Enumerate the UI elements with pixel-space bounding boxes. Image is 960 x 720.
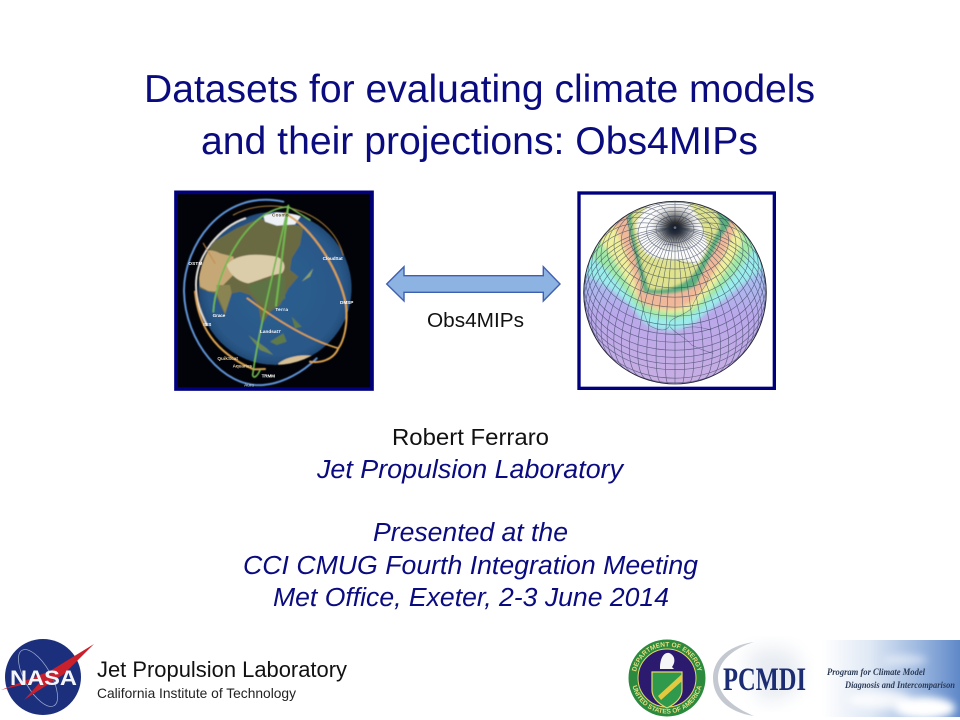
arrow: double-headed Obs4MIPs link	[387, 267, 560, 301]
panel: program banner with clouds: Diagnosis and Intercomparison	[844, 680, 955, 690]
satellite labels: Landsat7	[260, 329, 281, 334]
globe with coloured field	[580, 195, 770, 384]
icon: PCMDI logo: PCMDI	[723, 662, 806, 698]
title	[144, 68, 815, 163]
meeting details: Met Office, Exeter, 2-3 June 2014	[273, 584, 669, 612]
icon: NASA logo	[1, 639, 94, 715]
JPL label: Jet Propulsion Laboratory	[97, 657, 347, 682]
satellite labels: Terra	[275, 307, 288, 312]
satellite labels: OSTM	[188, 261, 202, 266]
panel: climate model globe grid	[579, 193, 774, 388]
icon: Department of Energy seal: DEPARTMENT OF ENERGY	[632, 642, 702, 672]
satellite labels	[188, 212, 353, 387]
icon: NASA logo: NASA	[10, 667, 77, 690]
meeting details: Presented at the	[373, 519, 568, 547]
latitude and longitude grid	[584, 201, 766, 384]
arrow label: Obs4MIPs	[427, 310, 524, 332]
panel: program banner with clouds: Program for Climate Model	[827, 667, 925, 677]
satellite labels: Aquarius	[233, 363, 252, 368]
satellite labels: Cosmo	[272, 212, 289, 217]
orbit tracks	[184, 200, 347, 385]
north pole contours	[652, 204, 698, 250]
continent coastlines	[627, 217, 733, 353]
satellite labels: DMSP	[340, 300, 353, 305]
panel: satellite orbits around Earth	[176, 192, 372, 389]
icon: Department of Energy seal: UNITED STATES OF AMERICA	[632, 685, 702, 714]
icon: Department of Energy seal	[628, 640, 706, 716]
icon: PCMDI logo	[713, 642, 806, 716]
presenter name: Robert Ferraro	[392, 424, 549, 450]
satellite labels: QuikScat	[217, 356, 238, 361]
satellite labels: ISS	[203, 322, 211, 327]
affiliation: Jet Propulsion Laboratory	[316, 456, 625, 484]
satellite labels: CloudSat	[323, 256, 343, 261]
globe outline	[584, 201, 766, 384]
meeting details	[243, 519, 698, 612]
title: and their projections: Obs4MIPs	[201, 120, 758, 163]
panel: program banner with clouds	[822, 640, 960, 719]
meeting details: CCI CMUG Fourth Integration Meeting	[243, 552, 698, 580]
earth globe	[198, 212, 352, 368]
Caltech label: California Institute of Technology	[97, 685, 296, 701]
satellite labels: Aura	[244, 382, 254, 387]
satellite labels: Grace	[213, 313, 226, 318]
title: Datasets for evaluating climate models	[144, 68, 815, 111]
satellite labels: TRMM	[262, 373, 275, 378]
